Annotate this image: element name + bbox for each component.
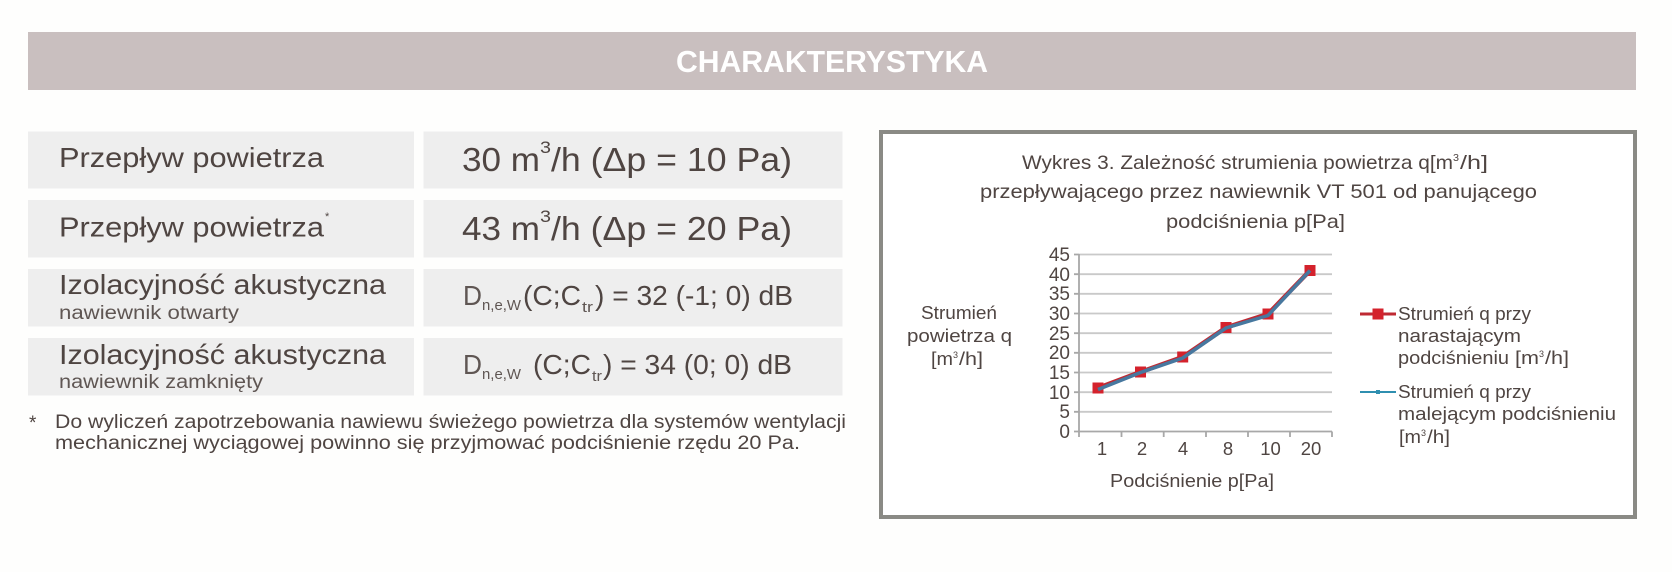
row: acoustic insulation open: tr: [582, 299, 593, 316]
legend entry: falling: 3: [1421, 428, 1426, 438]
row: acoustic insulation closed: ) = 34 (0; 0) dB: [603, 349, 792, 380]
y axis title: /h]: [959, 348, 983, 369]
row: air flow 10 Pa: 3: [540, 138, 551, 157]
line chart: [1049, 245, 1332, 459]
series: falling negative pressure: [1098, 270, 1310, 390]
footnote: mechanicznej wyciągowej powinno się przyjmować podciśnienie rzędu 20 Pa.: [55, 433, 800, 454]
axes: [1074, 254, 1332, 437]
row: acoustic insulation closed: D: [463, 349, 482, 380]
legend entry: rising: [1360, 303, 1569, 368]
row: acoustic insulation open: Izolacyjność akustyczna: [59, 269, 386, 300]
y axis labels: 15: [1049, 363, 1070, 384]
footnote: Do wyliczeń zapotrzebowania nawiewu świeżego powietrza dla systemów wentylacji: [55, 412, 846, 433]
y axis labels: [1049, 245, 1070, 443]
y axis title: powietrza q: [907, 325, 1012, 346]
y axis title: 3: [953, 350, 958, 360]
panel: specification table: [28, 132, 842, 396]
series: rising negative pressure: [1092, 265, 1316, 394]
y axis title: [907, 302, 1012, 369]
legend entry: rising: /h]: [1545, 347, 1569, 368]
panel: chart: [881, 132, 1635, 517]
gridlines: [1079, 254, 1332, 412]
row: acoustic insulation open: [28, 269, 842, 326]
y axis labels: 35: [1049, 284, 1070, 305]
chart title: podciśnienia p[Pa]: [1166, 211, 1345, 233]
row: air flow 10 Pa: Przepływ powietrza: [59, 142, 324, 173]
y axis labels: 25: [1049, 324, 1070, 345]
row: acoustic insulation open: D: [463, 280, 482, 311]
y axis labels: 10: [1049, 383, 1070, 404]
row: air flow 20 Pa: 43 m: [462, 210, 540, 247]
row: air flow 20 Pa: Przepływ powietrza: [59, 212, 324, 242]
legend entry: falling: [m: [1399, 426, 1421, 447]
row: air flow 20 Pa: *: [325, 211, 330, 223]
row: acoustic insulation open: n,e,W: [482, 297, 522, 314]
row: acoustic insulation open: (C;C: [523, 280, 581, 311]
legend entry: rising: podciśnieniu: [1398, 347, 1509, 368]
x axis labels: 4: [1178, 438, 1188, 459]
legend entry: rising: [m: [1515, 347, 1539, 368]
legend: [1360, 303, 1616, 447]
x axis labels: 1: [1097, 438, 1107, 459]
row: acoustic insulation closed: tr: [592, 368, 602, 385]
row: acoustic insulation closed: (C;C: [533, 349, 591, 380]
legend entry: rising: 3: [1539, 349, 1544, 359]
x axis labels: 20: [1301, 438, 1321, 459]
row: air flow 10 Pa: [28, 132, 842, 188]
chart title: /h]: [1460, 152, 1488, 174]
y axis title: [m: [931, 348, 953, 369]
row: air flow 20 Pa: /h (Δp = 20 Pa): [551, 210, 792, 247]
row: acoustic insulation closed: [28, 338, 842, 396]
legend entry: rising: narastającym: [1398, 325, 1521, 346]
y axis labels: 5: [1059, 402, 1070, 423]
row: air flow 20 Pa: 3: [540, 207, 551, 226]
row: air flow 20 Pa: [28, 200, 842, 258]
y axis labels: 0: [1059, 422, 1070, 443]
x axis labels: 2: [1137, 438, 1147, 459]
row: air flow 10 Pa: 30 m: [462, 141, 540, 178]
row: air flow 10 Pa: /h (Δp = 10 Pa): [551, 141, 792, 178]
y axis labels: 20: [1049, 343, 1070, 364]
legend entry: falling: malejącym podciśnieniu: [1398, 403, 1616, 424]
title: CHARAKTERYSTYKA: [676, 44, 988, 79]
chart title: 3: [1453, 153, 1459, 164]
chart title: Wykres 3. Zależność strumienia powietrza q[m: [1022, 152, 1453, 174]
y axis labels: 40: [1049, 265, 1070, 286]
legend entry: falling: [1360, 381, 1616, 447]
title banner: [28, 32, 1636, 90]
row: acoustic insulation closed: n,e,W: [482, 366, 522, 383]
x axis labels: [1097, 438, 1321, 459]
chart title: przepływającego przez nawiewnik VT 501 od panującego: [980, 181, 1537, 203]
y axis title: Strumień: [921, 302, 997, 323]
x axis title: Podciśnienie p[Pa]: [1110, 470, 1274, 491]
row: acoustic insulation open: ) = 32 (-1; 0) dB: [595, 280, 793, 311]
y axis labels: 30: [1049, 304, 1070, 325]
legend entry: falling: /h]: [1427, 426, 1450, 447]
footnote: [29, 412, 846, 454]
legend entry: falling: Strumień q przy: [1398, 381, 1532, 402]
chart title: [980, 152, 1537, 233]
row: acoustic insulation closed: Izolacyjność akustyczna: [59, 339, 386, 370]
y axis labels: 45: [1049, 245, 1070, 266]
legend entry: rising: Strumień q przy: [1398, 303, 1532, 324]
footnote: *: [29, 413, 37, 434]
row: acoustic insulation open: nawiewnik otwarty: [59, 303, 240, 324]
row: acoustic insulation closed: nawiewnik zamknięty: [59, 372, 264, 393]
x axis labels: 10: [1260, 438, 1281, 459]
x axis labels: 8: [1223, 438, 1233, 459]
